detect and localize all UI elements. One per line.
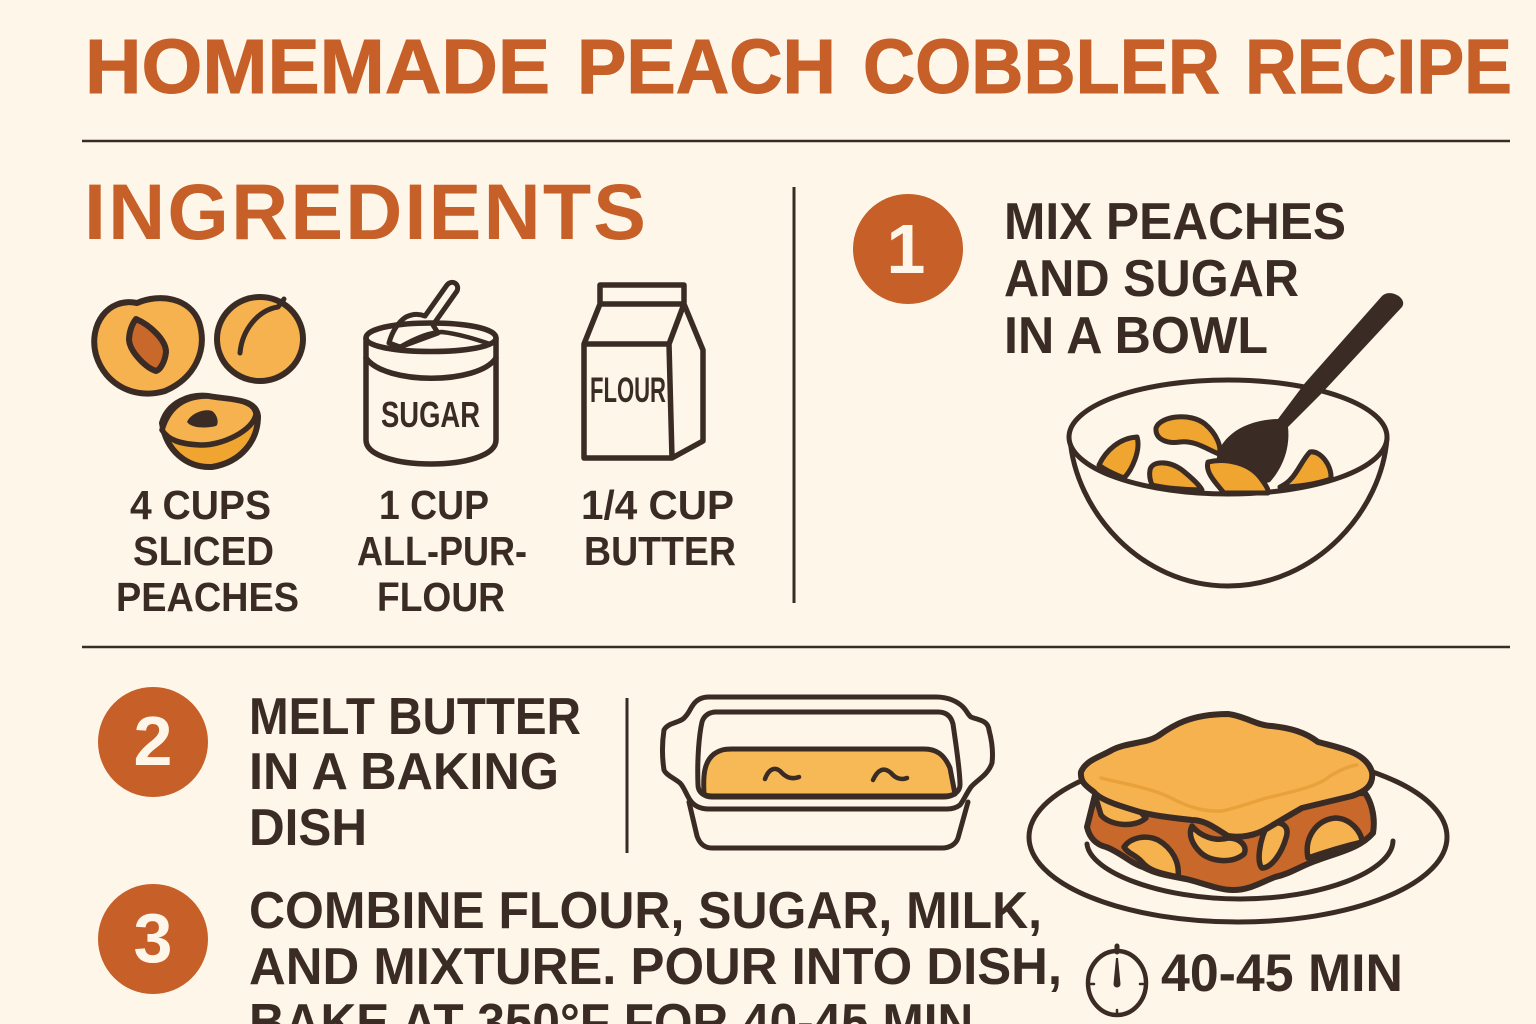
title: HOMEMADE: [85, 24, 550, 110]
label: butter: 1/4 CUP: [581, 482, 734, 528]
step badge 2: [98, 687, 208, 797]
bake time: 40-45 MIN: [1161, 944, 1403, 1003]
step 1 text: [1004, 193, 1346, 365]
label: butter: [581, 482, 736, 574]
icon: served cobbler on plate: [1029, 714, 1447, 922]
step 2 text: MELT BUTTER: [249, 688, 581, 746]
title: RECIPE: [1245, 24, 1512, 110]
panel: ingredients: [84, 167, 736, 620]
icon: mixing bowl with spoon: [1069, 293, 1403, 586]
label: peaches: 4 CUPS: [130, 482, 271, 528]
step 1 text: IN A BOWL: [1004, 307, 1268, 365]
panel: step 3: [98, 882, 1403, 1024]
panel: step 1: [853, 193, 1403, 586]
step badge 1: 1: [887, 210, 925, 288]
icon: peaches: [94, 297, 303, 467]
title: COBBLER: [863, 24, 1220, 110]
label: sugar: 1 CUP: [379, 482, 489, 528]
step badge 3: 3: [134, 899, 172, 977]
label: butter: BUTTER: [584, 528, 736, 574]
icon: flour carton: [584, 285, 703, 458]
step 2 text: IN A BAKING: [249, 743, 559, 801]
step 3 text: AND MIXTURE. POUR INTO DISH,: [249, 938, 1062, 996]
label: sugar: FLOUR: [377, 574, 505, 620]
step badge 2: 2: [134, 702, 172, 780]
icon: sugar jar: SUGAR: [381, 394, 480, 435]
label: peaches: [116, 482, 299, 620]
heading: ingredients: INGREDIENTS: [84, 167, 646, 256]
icon: baking dish with butter: [662, 697, 993, 848]
icon: stopwatch: [1088, 946, 1146, 1015]
step 3 text: COMBINE FLOUR, SUGAR, MILK,: [249, 882, 1042, 940]
icon: flour carton: FLOUR: [590, 371, 666, 410]
icon: sugar jar: [366, 282, 496, 464]
label: sugar: ALL-PUR-: [357, 528, 527, 574]
step 1 text: MIX PEACHES: [1004, 193, 1346, 251]
step badge 3: [98, 884, 208, 994]
label: sugar: [357, 482, 527, 620]
step 2 text: DISH: [249, 799, 367, 857]
step badge 1: [853, 194, 963, 304]
label: peaches: SLICED: [133, 528, 274, 574]
panel: step 2: [98, 687, 993, 857]
title: [85, 24, 1512, 110]
step 2 text: [249, 688, 581, 857]
title: PEACH: [577, 24, 836, 110]
step 1 text: AND SUGAR: [1004, 250, 1299, 308]
step 3 text: [249, 882, 1062, 1024]
label: peaches: PEACHES: [116, 574, 299, 620]
